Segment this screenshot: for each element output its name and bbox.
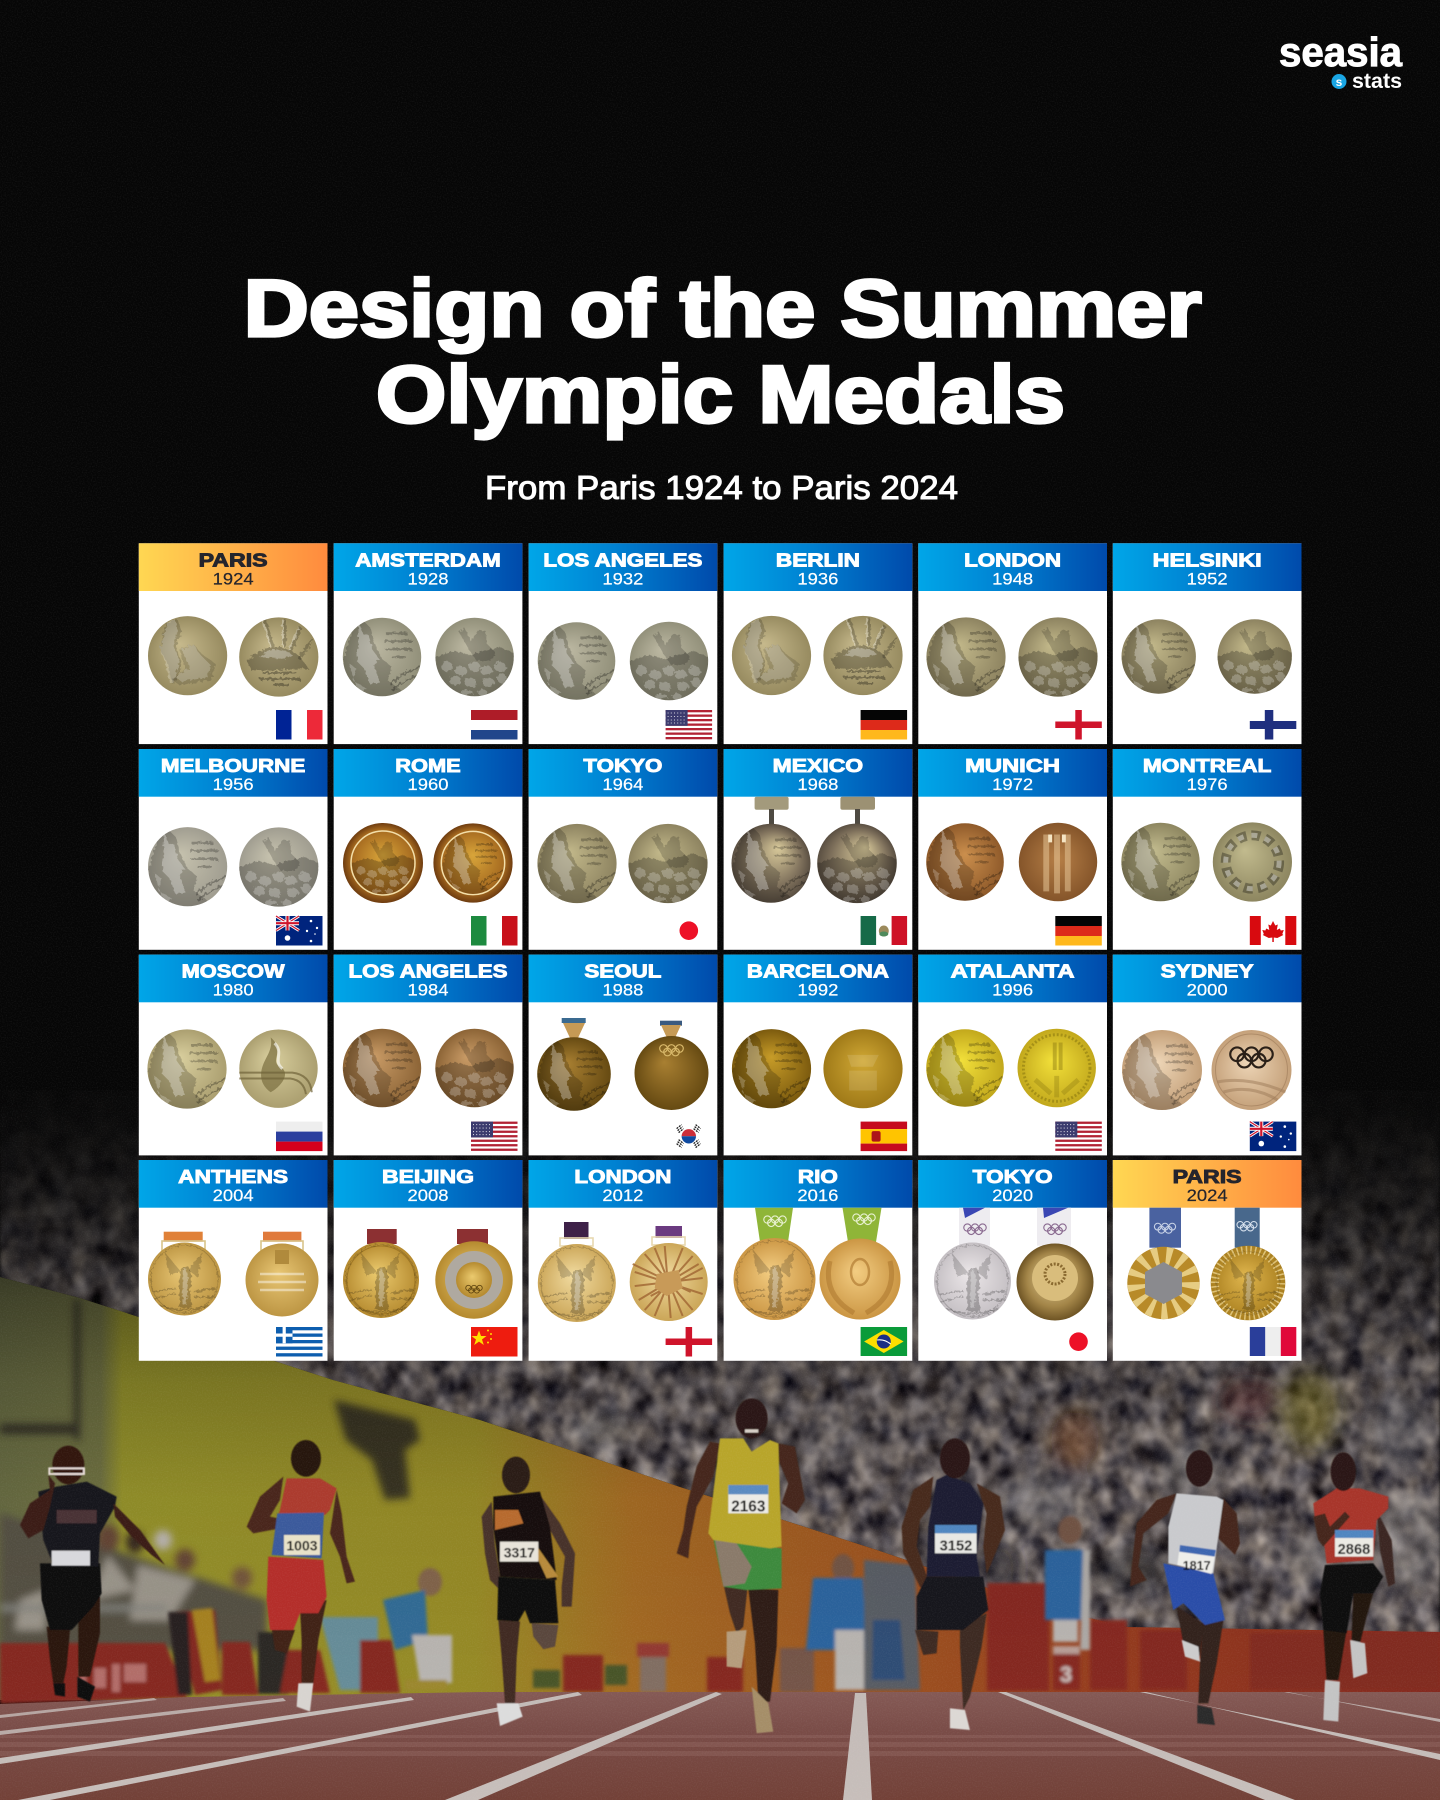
track lane bands <box>0 1735 1440 1756</box>
card: Paris 1924: PARIS <box>199 549 268 570</box>
card: Beijing 2008: BEIJING <box>382 1166 474 1187</box>
card: Seoul 1988: SEOUL <box>584 961 661 982</box>
title <box>244 264 1202 440</box>
card: London 1948 <box>918 543 1107 744</box>
card: Paris 2024 <box>1113 1160 1302 1361</box>
runner 2: 1003 <box>286 1538 318 1554</box>
title: Olympic Medals <box>376 350 1065 440</box>
card: London 2012 <box>529 1160 717 1361</box>
card: Sydney 2000 <box>1113 955 1302 1155</box>
card: Amsterdam 1928 <box>334 543 522 744</box>
card: Los Angeles 1932: 1932 <box>602 569 643 588</box>
red advertising boards: 3 <box>1060 1662 1072 1687</box>
card: Beijing 2008: 2008 <box>408 1186 449 1205</box>
card: Munich 1972: MUNICH <box>965 755 1060 776</box>
crowd in the stands <box>0 1120 1440 1632</box>
card: Tokyo 1964 <box>529 749 717 950</box>
card: Amsterdam 1928: 1928 <box>408 569 449 588</box>
card: Los Angeles 1932: LOS ANGELES <box>543 549 702 570</box>
card: Los Angeles 1932 <box>529 543 717 744</box>
card: Mexico 1968 <box>724 749 912 950</box>
card: Athens 2004 <box>139 1160 328 1361</box>
card: Los Angeles 1984: LOS ANGELES <box>349 961 508 982</box>
card: Tokyo 1964: 1964 <box>602 775 643 794</box>
card: Moscow 1980: 1980 <box>213 981 254 1000</box>
card: Helsinki 1952: 1952 <box>1187 569 1228 588</box>
card: Rome 1960: 1960 <box>408 775 449 794</box>
card: Seoul 1988: 1988 <box>602 981 643 1000</box>
card: London 1948: 1948 <box>992 569 1033 588</box>
runner 7 <box>1313 1452 1395 1722</box>
runner 4 <box>677 1398 805 1733</box>
card: Seoul 1988 <box>529 955 717 1155</box>
card: Melbourne 1956 <box>139 749 328 950</box>
running track <box>0 1692 1440 1800</box>
runner 5 <box>902 1438 1005 1730</box>
dark fade overlay over photo <box>0 1040 1440 1800</box>
runner 5: 3152 <box>940 1539 972 1555</box>
spectators lower left <box>0 1513 267 1650</box>
card: Atlanta 1996: 1996 <box>992 981 1033 1000</box>
title: Design of the Summer <box>244 264 1202 354</box>
card: Mexico 1968: 1968 <box>797 775 838 794</box>
stadium wall <box>0 1277 1440 1700</box>
card: Tokyo 2020: 2020 <box>992 1186 1033 1205</box>
card: Rome 1960 <box>334 749 522 950</box>
runner 6: 1817 <box>1183 1559 1211 1573</box>
white lane lines <box>0 1692 1440 1800</box>
card: Los Angeles 1984: 1984 <box>408 981 449 1000</box>
card: Atlanta 1996: ATALANTA <box>951 961 1075 982</box>
card: Atlanta 1996 <box>918 955 1107 1155</box>
stadium photo background <box>0 1090 1440 1800</box>
card: Tokyo 2020 <box>918 1160 1107 1361</box>
card: Beijing 2008 <box>334 1160 522 1361</box>
runner 3: 3317 <box>504 1544 535 1560</box>
runner 1 <box>20 1446 165 1702</box>
card: Sydney 2000: 2000 <box>1187 981 1228 1000</box>
logo: seasia stats: seasia <box>1279 29 1403 75</box>
card: Munich 1972: 1972 <box>992 775 1033 794</box>
stand dark post silhouette <box>0 1300 420 1500</box>
card: Amsterdam 1928: AMSTERDAM <box>355 549 501 570</box>
card: London 1948: LONDON <box>964 549 1061 570</box>
subtitle: From Paris 1924 to Paris 2024 <box>485 469 958 506</box>
card: Rome 1960: ROME <box>395 755 461 776</box>
runner 3 <box>482 1457 575 1726</box>
logo: seasia stats: stats <box>1352 69 1402 93</box>
card: London 2012: 2012 <box>602 1186 643 1205</box>
card: Moscow 1980 <box>139 955 328 1155</box>
runner 2 <box>247 1440 355 1712</box>
card: Moscow 1980: MOSCOW <box>182 961 285 982</box>
card: Tokyo 1964: TOKYO <box>583 755 662 776</box>
card: Barcelona 1992: BARCELONA <box>747 961 889 982</box>
card: Munich 1972 <box>918 749 1107 950</box>
card: Montreal 1976 <box>1113 749 1302 950</box>
card: Rio 2016: 2016 <box>797 1186 838 1205</box>
card: Tokyo 2020: TOKYO <box>973 1166 1053 1187</box>
card: Paris 2024: 2024 <box>1187 1186 1228 1205</box>
red advertising boards <box>0 1583 1440 1704</box>
card: Rio 2016: RIO <box>798 1166 838 1187</box>
card: Melbourne 1956: 1956 <box>213 775 254 794</box>
card: Mexico 1968: MEXICO <box>773 755 863 776</box>
card: London 2012: LONDON <box>574 1166 671 1187</box>
card: Athens 2004: ANTHENS <box>178 1166 288 1187</box>
card: Sydney 2000: SYDNEY <box>1161 961 1254 982</box>
medal grid <box>139 543 1301 1361</box>
card: Berlin 1936 <box>724 543 912 744</box>
card: Athens 2004: 2004 <box>213 1186 254 1205</box>
card: Barcelona 1992: 1992 <box>797 981 838 1000</box>
card: Paris 1924: 1924 <box>213 569 254 588</box>
runner 4: 2163 <box>731 1498 765 1515</box>
runner 6 <box>1130 1450 1240 1725</box>
card: Helsinki 1952 <box>1113 543 1302 744</box>
logo: seasia stats: s <box>1336 75 1343 89</box>
card: Berlin 1936: 1936 <box>797 569 838 588</box>
card: Melbourne 1956: MELBOURNE <box>161 755 305 776</box>
runners <box>20 1398 1395 1733</box>
runner 7: 2868 <box>1338 1542 1370 1558</box>
card: Montreal 1976: MONTREAL <box>1143 755 1271 776</box>
card: Paris 2024: PARIS <box>1173 1166 1242 1187</box>
card: Los Angeles 1984 <box>334 955 522 1155</box>
card: Rio 2016 <box>724 1160 912 1361</box>
card: Helsinki 1952: HELSINKI <box>1153 549 1262 570</box>
card: Barcelona 1992 <box>724 955 912 1155</box>
card: Paris 1924 <box>139 543 328 744</box>
card: Berlin 1936: BERLIN <box>776 549 860 570</box>
track officials <box>383 1516 1090 1690</box>
card: Montreal 1976: 1976 <box>1187 775 1228 794</box>
